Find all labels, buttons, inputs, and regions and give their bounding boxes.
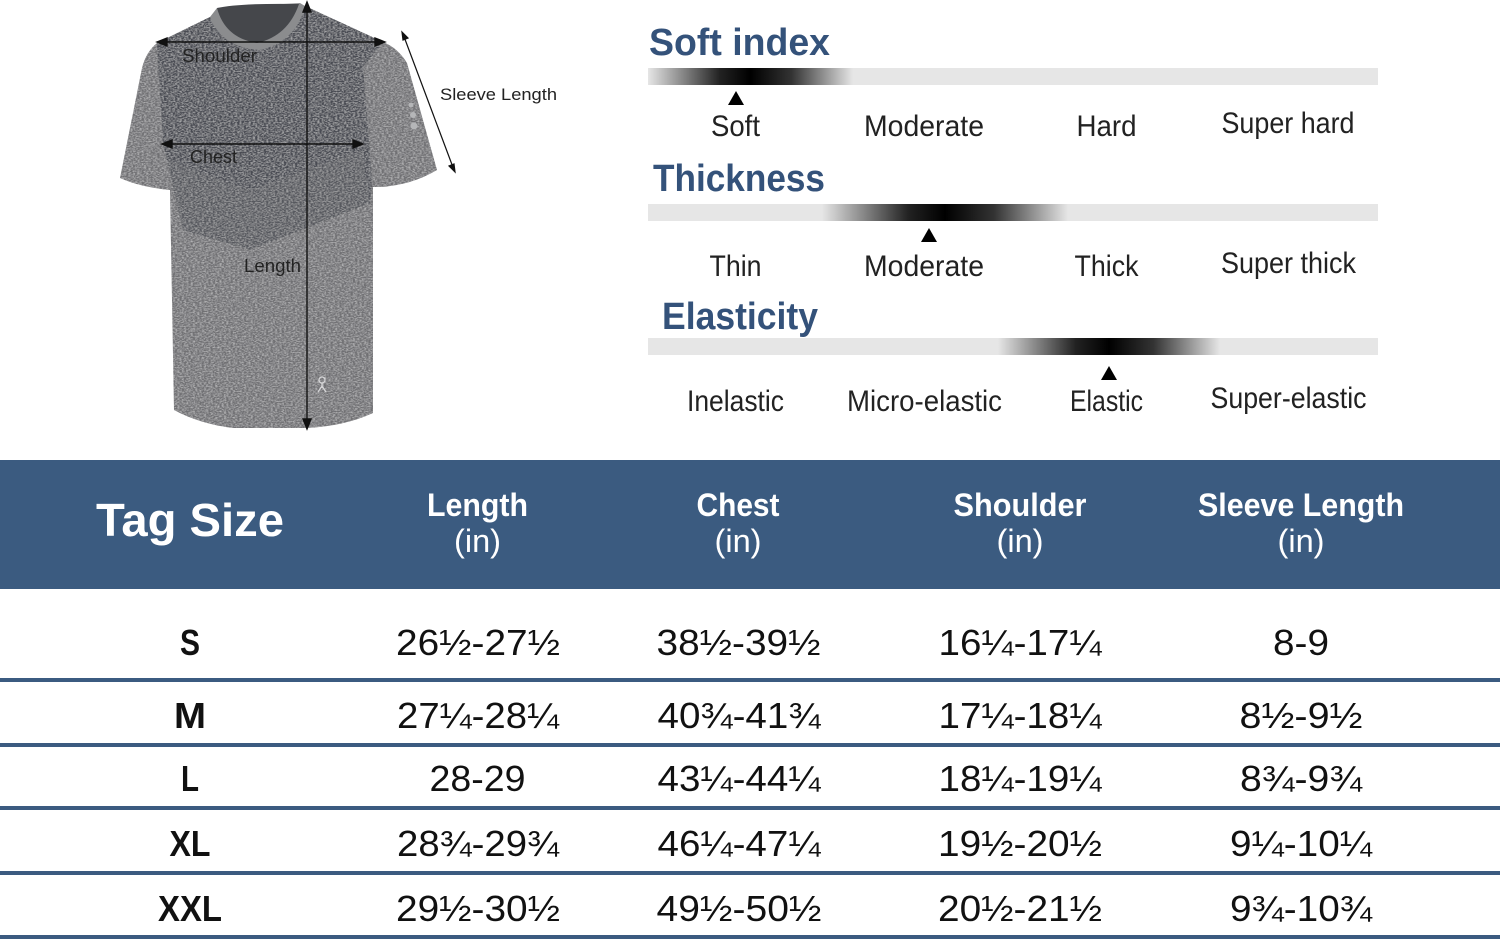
- header: Tag Size: Tag Size: [96, 494, 284, 546]
- heading: Thickness: Thickness: [653, 158, 825, 200]
- panel: thickness: [648, 158, 1378, 283]
- row XL: 9¼-10¼: [1230, 823, 1373, 864]
- row XXL: 9¾-10¾: [1230, 888, 1373, 929]
- row S: 26½-27½: [396, 622, 560, 663]
- label: Chest: Chest: [190, 147, 237, 167]
- length arrow: [303, 2, 311, 429]
- label: Length: Length: [244, 256, 301, 276]
- row S: 16¼-17¼: [938, 622, 1103, 663]
- scale labels: soft: [711, 107, 1354, 143]
- panel: soft index: [648, 22, 1378, 143]
- row separators: [0, 678, 1500, 939]
- header: Length: [427, 487, 528, 559]
- hem logo: [318, 377, 326, 392]
- sleeve dots: [408, 102, 418, 130]
- scale labels: thickness: Super thick: [1221, 247, 1357, 280]
- marker: [921, 228, 937, 242]
- row XL: 46¼-47¼: [658, 823, 822, 864]
- scale labels: elasticity: Inelastic: [687, 385, 784, 418]
- scale labels: elasticity: [687, 382, 1366, 418]
- lower chevron band: [167, 150, 370, 250]
- scale labels: thickness: [710, 247, 1357, 283]
- scale bar: thickness: [648, 204, 1378, 221]
- row XL: 19½-20½: [938, 823, 1102, 864]
- row L: [181, 758, 1363, 799]
- marker: [1101, 366, 1117, 380]
- header: Sleeve Length: Sleeve Length: [1198, 487, 1404, 523]
- row M: 8½-9½: [1240, 695, 1362, 736]
- header: Chest: [696, 487, 780, 559]
- row L: 43¼-44¼: [658, 758, 822, 799]
- row M: 17¼-18¼: [938, 695, 1103, 736]
- scale labels: soft: Super hard: [1222, 107, 1354, 140]
- label: Sleeve Length: Sleeve Length: [440, 85, 557, 104]
- row XXL: 49½-50½: [656, 888, 822, 929]
- label: Shoulder: Shoulder: [182, 46, 257, 66]
- header: Length: Length: [427, 487, 528, 523]
- row M: [174, 695, 1362, 736]
- scale bar: soft: [648, 68, 1378, 85]
- header: Shoulder: [954, 487, 1086, 559]
- t-shirt body and sleeves: [120, 6, 437, 428]
- row XXL: 29½-30½: [396, 888, 560, 929]
- header: Shoulder: (in): [996, 523, 1044, 559]
- scale labels: thickness: Moderate: [864, 250, 984, 283]
- header: Sleeve Length: (in): [1278, 523, 1324, 559]
- row XL: XL: [170, 823, 210, 864]
- heading: Elasticity: Elasticity: [662, 296, 818, 338]
- table header band: [0, 460, 1500, 589]
- scale labels: soft: Soft: [711, 110, 761, 143]
- header: Shoulder: Shoulder: [954, 487, 1086, 523]
- row L: 8¾-9¾: [1240, 758, 1363, 799]
- row M: M: [174, 695, 206, 736]
- header: Chest: Chest: [696, 487, 780, 523]
- row XL: [170, 823, 1373, 864]
- panel: elasticity: [648, 296, 1378, 418]
- row M: 40¾-41¾: [658, 695, 822, 736]
- row S: [180, 622, 1329, 663]
- header: Length: (in): [454, 523, 501, 559]
- row XXL: [158, 888, 1373, 929]
- shoulder arrow: [157, 38, 385, 46]
- scale labels: elasticity: Micro-elastic: [847, 385, 1002, 418]
- neck opening: [217, 4, 299, 43]
- collar: [210, 3, 305, 50]
- t-shirt diagram: [120, 2, 557, 429]
- header: Sleeve Length: [1198, 487, 1404, 559]
- row L: 28-29: [430, 758, 526, 799]
- row S: S: [180, 622, 200, 663]
- sleeve length arrow: [402, 32, 455, 172]
- scale labels: elasticity: Super-elastic: [1210, 382, 1366, 415]
- dark chest panel: [157, 6, 383, 250]
- row L: 18¼-19¼: [938, 758, 1103, 799]
- size table: [0, 460, 1500, 939]
- heading: Soft index: Soft index: [649, 22, 830, 64]
- row XL: 28¾-29¾: [397, 823, 560, 864]
- scale labels: elasticity: Elastic: [1070, 385, 1143, 418]
- chest arrow: [162, 140, 363, 148]
- scale labels: soft: Hard: [1076, 110, 1136, 143]
- scale labels: thickness: Thick: [1074, 250, 1139, 283]
- row S: 38½-39½: [656, 622, 820, 663]
- row XXL: 20½-21½: [938, 888, 1102, 929]
- row M: 27¼-28¼: [397, 695, 560, 736]
- row L: L: [181, 758, 199, 799]
- marker: [728, 91, 744, 105]
- row S: 8-9: [1273, 622, 1329, 663]
- scale labels: thickness: Thin: [710, 250, 762, 283]
- scale bar: elasticity: [648, 338, 1378, 355]
- row XXL: XXL: [158, 888, 222, 929]
- header: Chest: (in): [714, 523, 762, 559]
- scale labels: soft: Moderate: [864, 110, 984, 143]
